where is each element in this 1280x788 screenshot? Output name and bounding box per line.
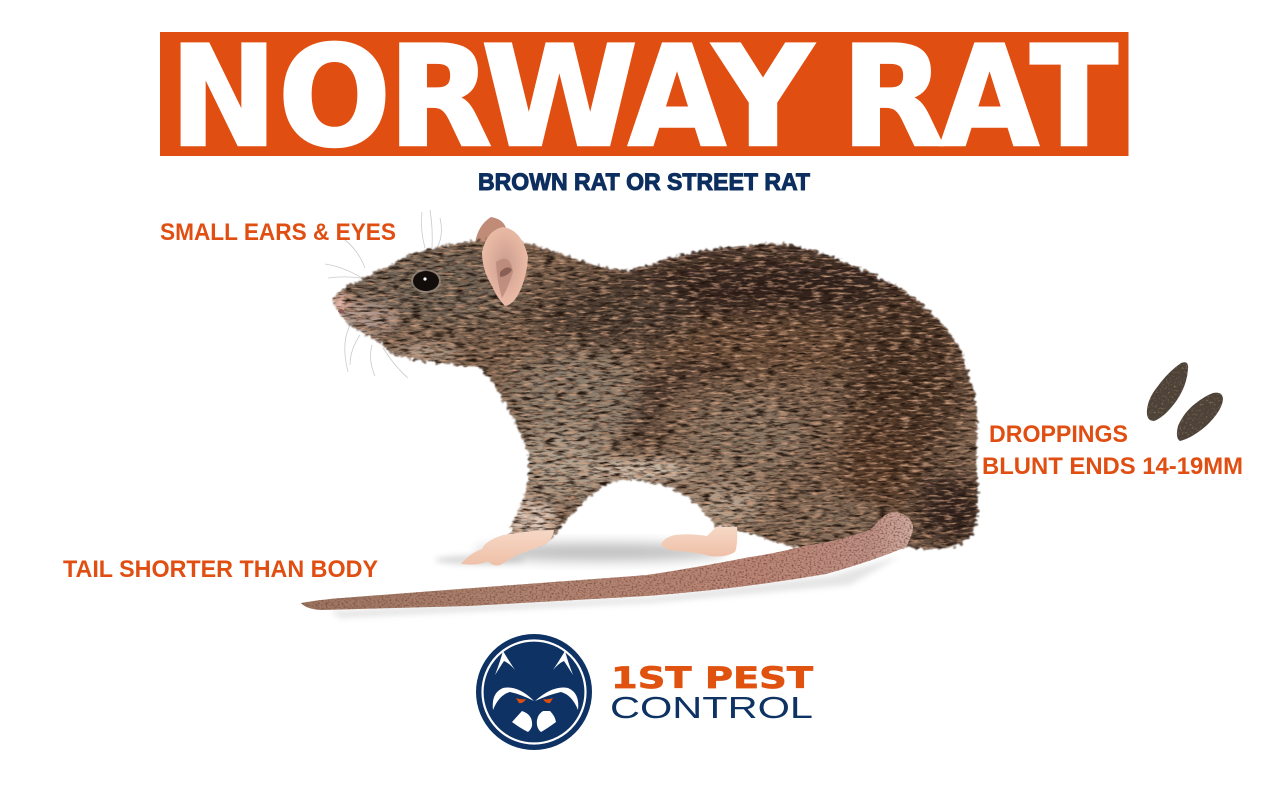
title text: W (481, 16, 638, 178)
label: blunt ends: BLUNT ENDS 14-19MM (982, 453, 1243, 480)
nostril (338, 309, 344, 313)
title text: O (278, 16, 391, 178)
front foot (461, 530, 554, 566)
whiskers (325, 210, 441, 378)
title banner (160, 16, 1128, 178)
title text: T (1030, 16, 1118, 178)
ground shadow (330, 543, 900, 618)
title text: R (841, 16, 945, 178)
hind foot (661, 527, 737, 556)
front ear (482, 227, 528, 306)
logo wordmark top: 1ST PEST (611, 661, 813, 695)
furry body (320, 230, 1000, 560)
rat illustration (301, 210, 1000, 618)
title text: Y (711, 16, 815, 178)
subtitle: BROWN RAT OR STREET RAT (478, 169, 810, 196)
eye (411, 269, 441, 293)
logo badge (476, 634, 592, 750)
back ear (475, 217, 506, 247)
label: droppings: DROPPINGS (989, 421, 1128, 448)
tail (301, 512, 913, 610)
title text: A (628, 16, 726, 178)
title text: A (940, 16, 1039, 178)
title text (170, 16, 1118, 178)
icon: droppings (1147, 362, 1223, 441)
title text: N (170, 16, 277, 178)
logo (476, 634, 813, 750)
title text: R (388, 16, 492, 178)
logo wordmark bottom: CONTROL (610, 690, 813, 725)
label: small ears and eyes: SMALL EARS & EYES (160, 219, 396, 246)
label: tail shorter than body: TAIL SHORTER THAN BODY (63, 556, 378, 583)
